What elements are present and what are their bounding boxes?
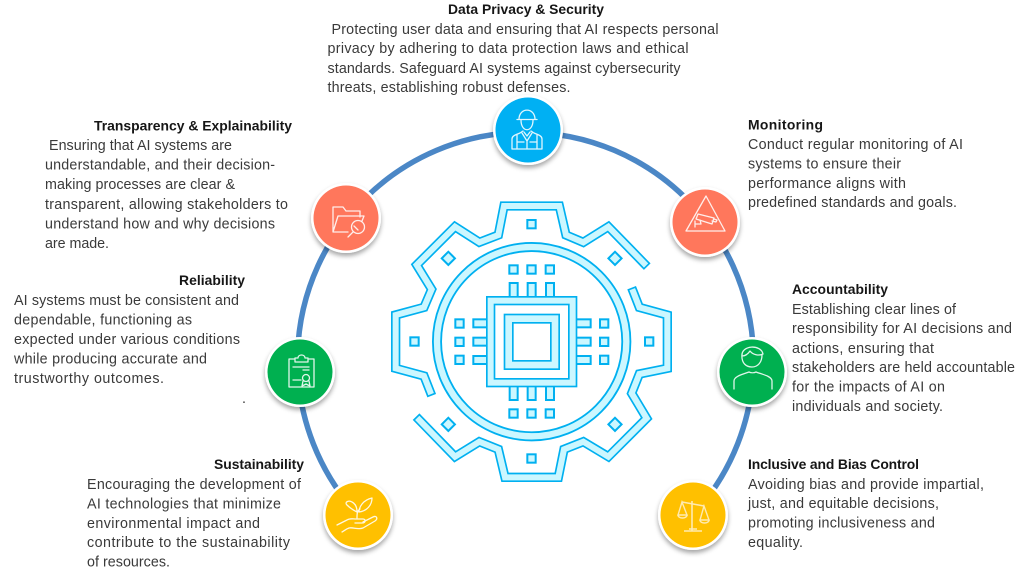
text block: Sustainability: of resources.: [87, 554, 170, 570]
text block: Reliability: trustworthy outcomes.: [14, 371, 164, 387]
text block: Transparency & Explainability: understandable, and their decision-: [45, 158, 275, 174]
text block: Sustainability: Sustainability: [214, 456, 304, 472]
text block: Sustainability: [87, 456, 304, 570]
icon: hand holding plant: [323, 480, 393, 550]
text block: Data Privacy & Security: standards. Safeguard AI systems against cybersecurity: [328, 61, 681, 77]
text block: Accountability: Establishing clear lines of: [792, 302, 956, 318]
text block: Accountability: actions, ensuring that: [792, 341, 934, 357]
text block: Monitoring: systems to ensure their: [748, 156, 901, 172]
text block: Transparency & Explainability: [45, 118, 292, 252]
text block: Monitoring: [748, 116, 963, 211]
text block: Sustainability: environmental impact and: [87, 516, 260, 532]
icon: surveillance camera warning: [670, 187, 740, 257]
connecting ring arc: [298, 132, 754, 515]
text block: Data Privacy & Security: Protecting user data and ensuring that AI respects personal: [332, 22, 718, 38]
icon: clipboard certificate: [265, 337, 335, 407]
text block: Reliability: .: [242, 391, 246, 407]
text block: Monitoring: Conduct regular monitoring of AI: [748, 137, 963, 153]
text block: Transparency & Explainability: Transparency & Explainability: [94, 118, 292, 134]
text block: Transparency & Explainability: making processes are clear &: [45, 177, 235, 193]
text block: Inclusive and Bias Control: Inclusive and Bias Control: [748, 456, 919, 472]
icon: worker with helmet: [493, 95, 563, 165]
text block: Reliability: expected under various conditions: [14, 332, 240, 348]
text block: Transparency & Explainability: transparent, allowing stakeholders to: [45, 197, 288, 213]
text block: Reliability: [13, 272, 246, 407]
text block: Transparency & Explainability: are made.: [45, 236, 109, 252]
text block: Accountability: [792, 281, 1015, 415]
text block: Reliability: Reliability: [179, 272, 245, 288]
icon: person: [717, 337, 787, 407]
text block: Inclusive and Bias Control: equality.: [748, 535, 803, 551]
text block: Data Privacy & Security: [328, 1, 718, 96]
text block: Sustainability: AI technologies that minimize: [87, 496, 281, 512]
text block: Accountability: for the impacts of AI on: [792, 380, 945, 396]
text block: Data Privacy & Security: Data Privacy & Security: [448, 1, 604, 17]
text block: Reliability: AI systems must be consistent and: [14, 293, 239, 309]
central gear with microchip: [396, 206, 667, 477]
text block: Accountability: stakeholders are held accountable: [792, 360, 1015, 376]
text block: Data Privacy & Security: privacy by adhering to data protection laws and ethical: [328, 41, 688, 57]
text block: Monitoring: Monitoring: [748, 116, 823, 132]
text block: Reliability: dependable, functioning as: [14, 312, 192, 328]
text block: Sustainability: Encouraging the development of: [87, 477, 301, 493]
icon: balance scales: [658, 480, 728, 550]
text block: Inclusive and Bias Control: Avoiding bias and provide impartial,: [748, 477, 984, 493]
text block: Inclusive and Bias Control: [747, 456, 984, 551]
text block: Data Privacy & Security: threats, establishing robust defenses.: [328, 80, 570, 96]
text block: Accountability: responsibility for AI decisions and: [792, 321, 1012, 337]
text block: Monitoring: performance aligns with: [748, 176, 906, 192]
icon: folder with magnifier: [311, 183, 381, 253]
text block: Inclusive and Bias Control: just, and equitable decisions,: [747, 496, 939, 512]
text block: Monitoring: predefined standards and goals.: [748, 195, 957, 211]
text block: Accountability: Accountability: [792, 281, 888, 297]
text block: Transparency & Explainability: Ensuring that AI systems are: [49, 138, 232, 154]
text block: Sustainability: contribute to the sustainability: [87, 535, 291, 551]
text block: Inclusive and Bias Control: promoting inclusiveness and: [748, 516, 935, 532]
text block: Accountability: individuals and society.: [792, 399, 943, 415]
text block: Reliability: while producing accurate and: [13, 352, 207, 368]
text block: Transparency & Explainability: understand how and why decisions: [45, 216, 275, 232]
